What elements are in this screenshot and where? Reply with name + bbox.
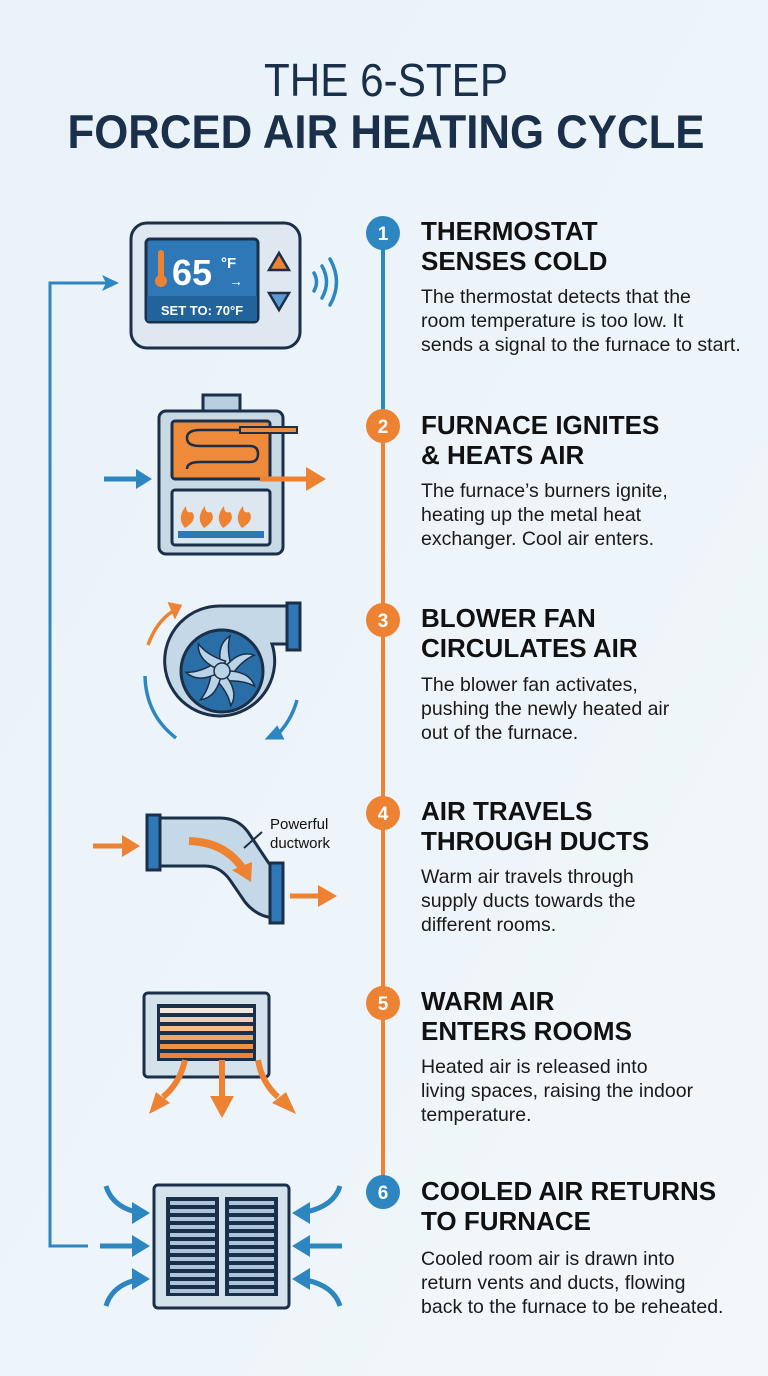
step 6 text: back to the furnace to be reheated. (421, 1296, 723, 1318)
icon: thermostat: 65 (172, 252, 212, 293)
step 4 text: THROUGH DUCTS (421, 826, 649, 856)
icon: furnace (104, 395, 326, 554)
step 2 text: The furnace’s burners ignite, (421, 480, 668, 502)
icon: thermostat: → (229, 273, 243, 289)
step 1 text: The thermostat detects that the (421, 286, 691, 308)
icon: duct: Powerful (270, 816, 328, 833)
step 1 text: THERMOSTAT (421, 216, 598, 246)
icon: duct: ductwork (270, 835, 331, 852)
step 3 text: CIRCULATES AIR (421, 633, 638, 663)
timeline: 6 (378, 1183, 388, 1204)
step 2 text: & HEATS AIR (421, 440, 584, 470)
icon: thermostat: SET TO: 70°F (161, 303, 243, 318)
step 4 text: AIR TRAVELS (421, 796, 592, 826)
timeline: 5 (378, 994, 389, 1015)
step 1 text: room temperature is too low. It (421, 310, 684, 332)
title: FORCED AIR HEATING CYCLE (68, 105, 704, 158)
step 2 text (421, 410, 668, 550)
step 3 text: out of the furnace. (421, 722, 578, 744)
step 4 text: supply ducts towards the (421, 890, 636, 912)
step 4 text (421, 796, 649, 936)
timeline (366, 216, 400, 1209)
step 6 text: TO FURNACE (421, 1206, 591, 1236)
step 3 text (421, 603, 670, 744)
step 1 text (421, 216, 741, 356)
step 4 text: Warm air travels through (421, 866, 634, 888)
timeline: 1 (378, 224, 389, 245)
step 1 text: sends a signal to the furnace to start. (421, 334, 741, 356)
step 5 text: living spaces, raising the indoor (421, 1080, 694, 1102)
timeline: 4 (378, 804, 389, 825)
step 6 text: Cooled room air is drawn into (421, 1248, 675, 1270)
step 3 text: The blower fan activates, (421, 674, 638, 696)
step 4 text: different rooms. (421, 914, 556, 936)
title: THE 6-STEP (264, 54, 508, 106)
step 5 text: ENTERS ROOMS (421, 1016, 632, 1046)
step 2 text: FURNACE IGNITES (421, 410, 659, 440)
step 5 text (421, 986, 694, 1126)
step 1 text: SENSES COLD (421, 246, 607, 276)
timeline: 2 (378, 417, 388, 438)
icon: thermostat (131, 223, 336, 348)
step 3 text: BLOWER FAN (421, 603, 596, 633)
timeline: 3 (378, 611, 388, 632)
step 5 text: WARM AIR (421, 986, 555, 1016)
return loop arrow (50, 275, 119, 1246)
step 2 text: exchanger. Cool air enters. (421, 528, 654, 550)
step 2 text: heating up the metal heat (421, 504, 642, 526)
icon: thermostat: °F (221, 255, 236, 272)
step 6 text (421, 1176, 723, 1318)
title (68, 54, 704, 158)
icon: blower fan (145, 603, 300, 738)
step 6 text: return vents and ducts, flowing (421, 1272, 685, 1294)
step 5 text: temperature. (421, 1104, 532, 1126)
step 5 text: Heated air is released into (421, 1056, 648, 1078)
icon: return vent (100, 1185, 342, 1308)
step 6 text: COOLED AIR RETURNS (421, 1176, 716, 1206)
step 3 text: pushing the newly heated air (421, 698, 670, 720)
icon: supply vent (144, 993, 296, 1118)
icon: duct (93, 815, 337, 923)
